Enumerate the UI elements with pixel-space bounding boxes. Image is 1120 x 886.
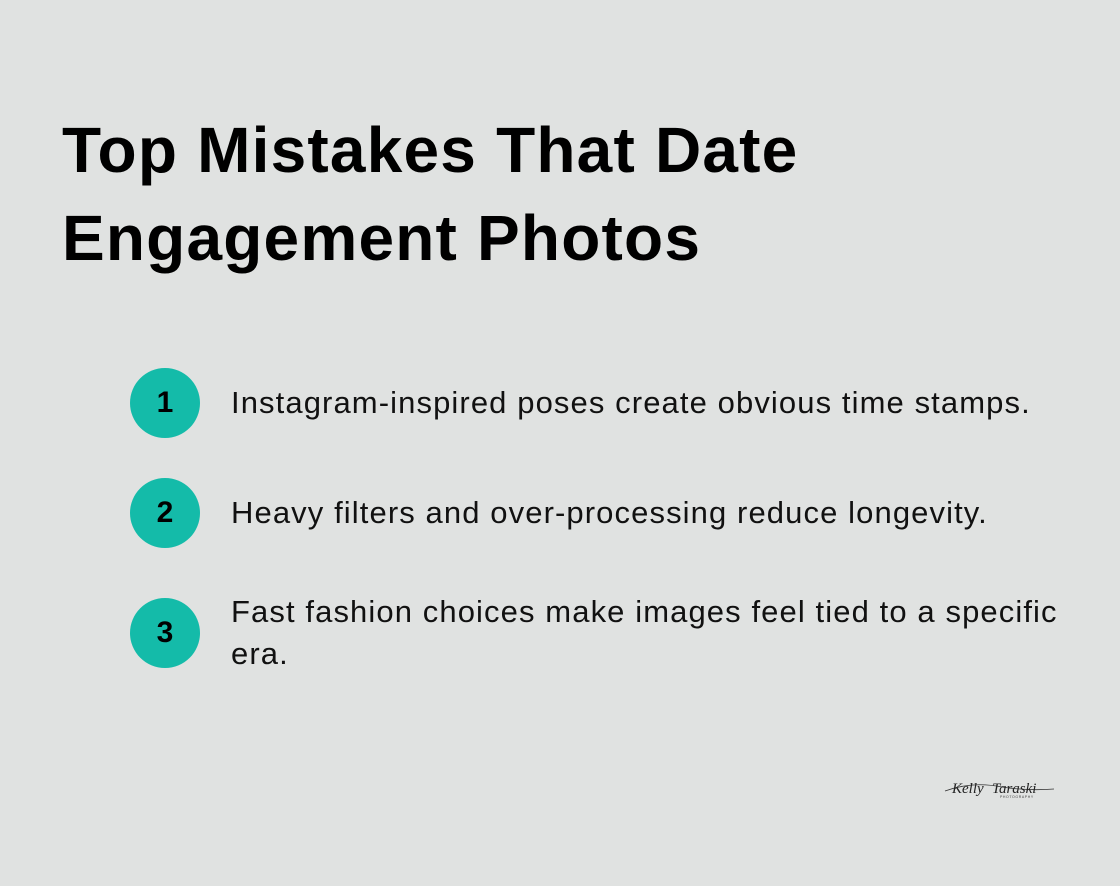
circle 2 <box>130 478 200 548</box>
signature logo: PHOTOGRAPHY <box>1000 795 1034 799</box>
title: Engagement Photos <box>62 202 701 274</box>
text 1: Instagram-inspired poses create obvious time stamps. <box>231 385 1031 420</box>
circle 1: 1 <box>157 386 173 419</box>
signature logo: Taraski <box>992 781 1036 797</box>
title <box>62 114 798 274</box>
signature logo: Kelly <box>951 781 984 797</box>
circle 3 <box>130 598 200 668</box>
text 3: era. <box>231 636 289 671</box>
circle 2: 2 <box>157 496 173 529</box>
signature logo <box>944 781 1054 799</box>
circle 3: 3 <box>157 616 173 649</box>
text 3 <box>231 594 1058 671</box>
text 3: Fast fashion choices make images feel tied to a specific <box>231 594 1058 629</box>
title: Top Mistakes That Date <box>62 114 798 186</box>
text 2: Heavy filters and over-processing reduce longevity. <box>231 495 988 530</box>
circle 1 <box>130 368 200 438</box>
